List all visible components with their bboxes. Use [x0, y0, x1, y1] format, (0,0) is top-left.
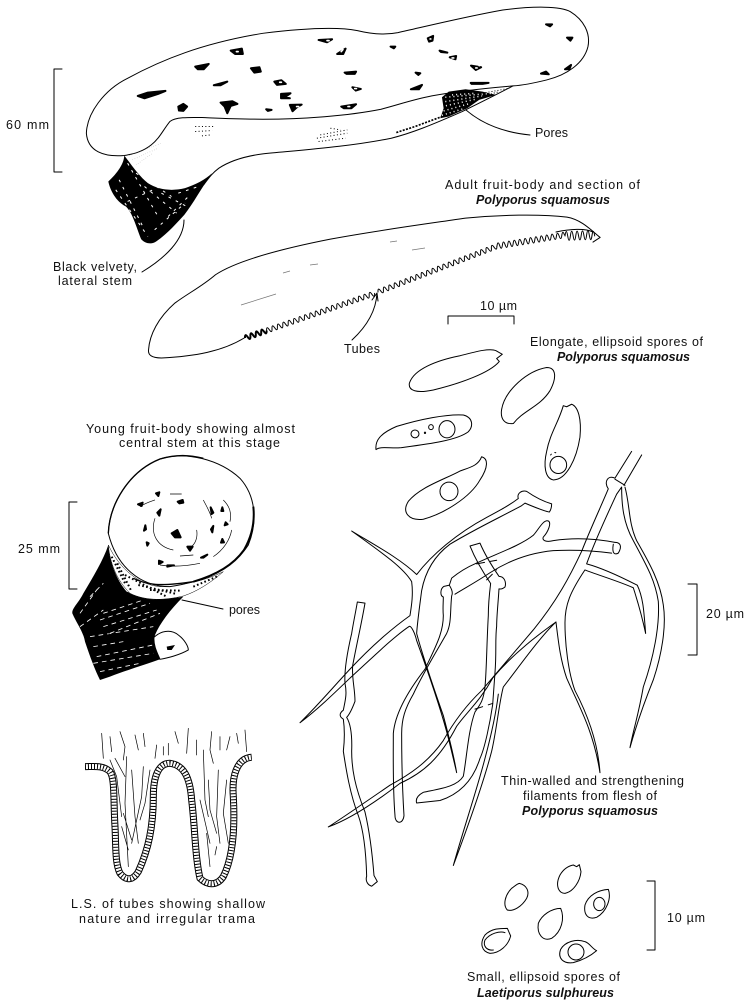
label: black velvety lateral stem [53, 220, 184, 288]
underside outline [204, 86, 513, 185]
tubes along the lower edge [245, 330, 267, 339]
filament: arc and long tube [393, 521, 620, 822]
label: pores (young): pores [229, 603, 260, 617]
label: tubes: Tubes [344, 342, 380, 356]
caption: L.S. of tubes [71, 897, 266, 926]
hymenium cells [85, 757, 252, 884]
spore 5 with droplet [406, 457, 486, 519]
caption: small spores: Laetiporus sulphureus [477, 986, 614, 1000]
pores patch [440, 89, 496, 118]
hymenium band fill [85, 757, 252, 884]
small knob [154, 631, 188, 659]
caption: filaments: Thin-walled and strengthening [501, 774, 684, 788]
caption: young fruit-body: central stem at this stage [119, 436, 280, 450]
adult fruit-body drawing [86, 7, 589, 243]
caption: small spores [467, 970, 621, 1000]
caption: elongate spores [530, 335, 704, 364]
caption: filaments: filaments from flesh of [523, 789, 658, 803]
white flecks on stem [116, 163, 199, 236]
filament tree: left branched [300, 491, 552, 773]
spore 2 [501, 367, 555, 424]
pale stipple at stem top [129, 143, 161, 165]
label: tubes [344, 293, 380, 356]
section outline [148, 215, 600, 358]
filament: central rod and foot [416, 543, 505, 803]
spore b [558, 865, 581, 893]
cap concentric marks [140, 494, 232, 566]
cap [108, 456, 254, 587]
caption: young fruit-body: Young fruit-body showing almost [86, 422, 296, 436]
spore c [585, 889, 609, 918]
scale bar: 25 mm [18, 502, 77, 589]
elongate spores and filaments [300, 350, 664, 886]
scale bar: 20 um: 20 µm [706, 607, 744, 621]
caption: adult fruit-body [445, 178, 641, 207]
spore e [482, 928, 511, 953]
label: pores [466, 110, 568, 140]
pores band [108, 545, 223, 599]
faint flesh marks [241, 241, 425, 305]
section of fruit-body [148, 215, 600, 358]
caption: adult fruit-body: Polyporus squamosus [476, 193, 610, 207]
cap outline [86, 7, 589, 156]
L.S. of tubes drawing [85, 728, 252, 884]
cap scales [138, 24, 572, 113]
spore f [560, 940, 597, 963]
trama lines [102, 728, 247, 867]
spore d [538, 908, 563, 939]
stem, black velvety [108, 156, 212, 243]
scale bar: 25 mm: 25 mm [18, 542, 60, 556]
caption: filaments: Polyporus squamosus [522, 804, 658, 818]
spore a [505, 883, 528, 910]
caption: filaments [501, 774, 684, 818]
label: black velvety lateral stem: lateral stem [58, 274, 132, 288]
scale bar: 60 mm [6, 69, 62, 172]
caption: elongate spores: Polyporus squamosus [557, 350, 690, 364]
filament: left vertical [340, 602, 377, 886]
spore 4 with droplet [545, 404, 580, 480]
caption: L.S. of tubes: L.S. of tubes showing shallow [71, 897, 266, 911]
caption: adult fruit-body: Adult fruit-body and section of [445, 178, 641, 192]
cap scales [138, 492, 228, 567]
caption: L.S. of tubes: nature and irregular trama [79, 912, 255, 926]
spore 3 with droplets [376, 415, 472, 450]
scale bar: 10 um [448, 299, 517, 324]
caption: small spores: Small, ellipsoid spores of [467, 970, 621, 984]
label: pores: Pores [535, 126, 568, 140]
caption: young fruit-body [86, 422, 296, 450]
hymenium band outline [85, 757, 252, 884]
scale bar: 10 um lower [647, 881, 705, 950]
scale bar: 60 mm: 60 mm [6, 118, 49, 132]
small pore groups [195, 127, 347, 142]
scale bar: 10 um lower: 10 µm [667, 911, 705, 925]
label: pores (young) [182, 600, 260, 617]
label: black velvety lateral stem: Black velvety, [53, 260, 137, 274]
white streaks on stem [80, 583, 160, 672]
young fruit-body drawing [72, 456, 254, 680]
filament: right trunk [328, 451, 664, 866]
small spores of Laetiporus [482, 865, 609, 963]
caption: elongate spores: Elongate, ellipsoid spores of [530, 335, 704, 349]
black stem [72, 545, 183, 680]
scale bar: 20 um [688, 584, 744, 655]
scale bar: 10 um: 10 µm [480, 299, 517, 313]
spore 1 [409, 350, 502, 392]
